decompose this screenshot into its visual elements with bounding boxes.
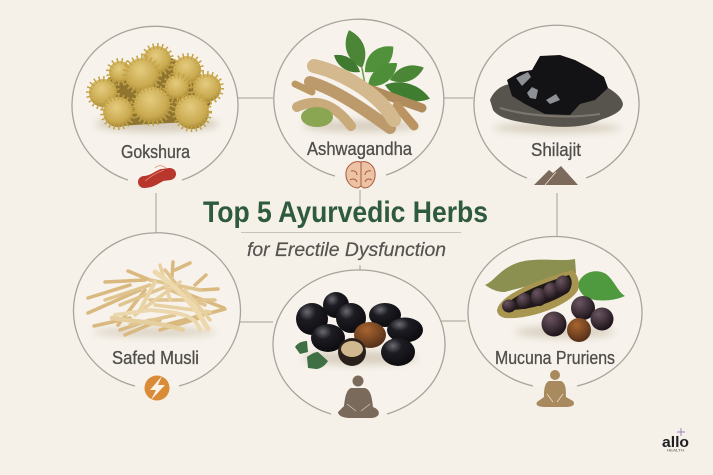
herb image: fuzzy pod [485,259,576,292]
icon: lightning bolt [144,376,170,400]
panel: Gokshura [72,26,238,182]
panel: center herb [273,270,445,418]
icon: red muscle [144,166,170,182]
panel: Ashwagandha [274,19,444,188]
label: Ashwagandha: Ashwagandha [307,139,413,159]
circle outline: Ashwagandha [274,19,444,176]
label: Mucuna Pruriens: Mucuna Pruriens [495,348,615,368]
panel: Mucuna Pruriens [468,236,642,407]
circle outline: Shilajit [474,25,639,178]
logo: allo health: allo [662,434,689,451]
herb image: mucuna seeds [542,296,614,342]
label: Safed Musli: Safed Musli [112,348,199,368]
label: Gokshura: Gokshura [121,142,191,162]
herb image: open pod with seeds [497,270,579,318]
icon: meditating figure tan [537,370,574,407]
herb image: rock base [490,84,623,127]
herb image: ashwagandha leaves [331,27,432,107]
panel: Safed Musli [74,233,241,400]
herb image: spiky gokshura fruits [89,46,221,129]
herb image: green leaf [578,271,625,300]
herb image: ashwagandha roots [295,66,422,128]
title: Top 5 Ayurvedic Herbs [203,196,488,229]
label: Shilajit: Shilajit [531,140,581,160]
circle outline: Gokshura [72,26,238,180]
icon: meditating figure brown [338,376,379,418]
connector lines [156,98,557,322]
logo: allo health [662,428,689,452]
circle outline: center herb [273,270,445,414]
circle outline: Mucuna Pruriens [468,236,642,386]
herb image: dark berries [296,292,423,366]
herb image: safed musli strands [88,262,225,335]
herb image: green fruit [301,107,333,127]
herb image: small leaves [295,341,328,369]
panel: Shilajit [474,25,639,185]
logo: allo health: HEALTH [667,448,685,452]
icon: brain [346,162,375,188]
subtitle: for Erectile Dysfunction [247,240,446,261]
title rule [241,232,461,233]
icon: mountains [534,166,578,185]
herb image: shilajit resin [507,55,608,115]
circle outline: Safed Musli [74,233,241,386]
